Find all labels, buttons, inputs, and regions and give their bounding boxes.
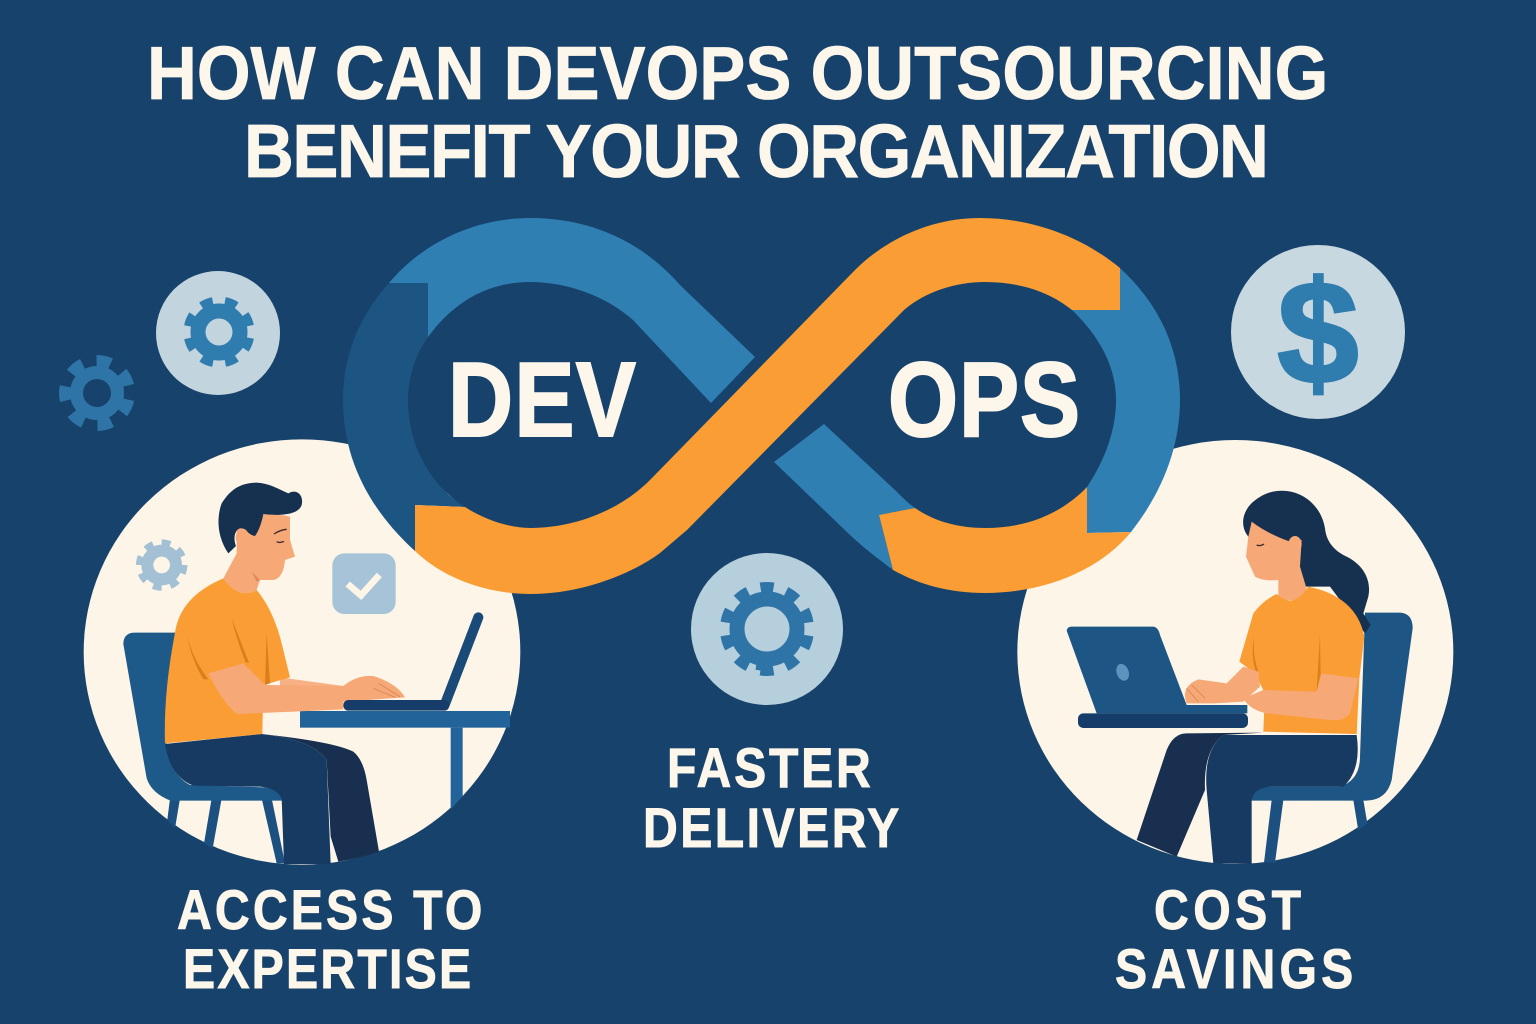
- orange crossing band: [415, 218, 1120, 594]
- shirt: [165, 578, 290, 743]
- label: faster delivery: [643, 738, 899, 860]
- title: HOW CAN DEVOPS OUTSOURCING: [147, 32, 1328, 116]
- laptop: [1067, 627, 1247, 713]
- woman at desk: [1067, 491, 1413, 864]
- title: [147, 32, 1328, 194]
- label: access to expertise: [177, 880, 482, 1001]
- eye and brow: [274, 529, 287, 542]
- chair legs: [1264, 800, 1367, 863]
- panel: cost savings illustration: [1017, 440, 1453, 864]
- rear leg: [1137, 733, 1263, 857]
- front leg: [165, 734, 331, 864]
- chair: [123, 633, 284, 801]
- neck and face: [1246, 522, 1310, 600]
- man at desk: [123, 483, 510, 864]
- devops infinity loop: [343, 218, 1180, 594]
- label: access to expertise: EXPERTISE: [183, 939, 471, 1001]
- label: faster delivery: FASTER: [667, 738, 871, 800]
- label: DEV: DEV: [448, 340, 636, 459]
- hair: [1243, 491, 1371, 633]
- ear: [236, 529, 249, 546]
- neck and face: [223, 510, 295, 593]
- icon: gear in circle center: [691, 553, 843, 705]
- chair: [1252, 613, 1413, 801]
- icon: dollar in circle: [1231, 245, 1405, 419]
- label: cost savings: COST: [1154, 880, 1301, 942]
- shirt folds: [187, 618, 270, 685]
- hair: [218, 483, 302, 553]
- panel: access to expertise illustration: [84, 439, 520, 865]
- icon: gear: [140, 543, 183, 587]
- laptop: [343, 617, 478, 711]
- shirt: [1239, 587, 1364, 734]
- label: cost savings: SAVINGS: [1115, 939, 1353, 1001]
- rear leg: [262, 734, 379, 862]
- icon: dollar in circle: $: [1277, 251, 1359, 414]
- rear arm: [280, 677, 343, 697]
- front leg: [1206, 735, 1358, 864]
- shirt folds: [1253, 635, 1321, 692]
- table: [300, 711, 510, 809]
- front arm: [208, 663, 405, 714]
- upper left light blue band: [389, 218, 755, 403]
- label: cost savings: [1115, 880, 1353, 1001]
- lower middle light blue band: [774, 424, 915, 570]
- label: faster delivery: DELIVERY: [643, 798, 899, 860]
- icon: checkmark badge: [332, 553, 396, 614]
- desk: [1078, 713, 1248, 728]
- title: BENEFIT YOUR ORGANIZATION: [244, 110, 1269, 194]
- label: OPS: OPS: [888, 340, 1080, 459]
- right light blue band: [1072, 268, 1180, 533]
- chair legs: [167, 798, 285, 863]
- icon: gear in circle top left: [156, 271, 280, 395]
- arms and hands: [1185, 667, 1260, 703]
- left dark blue band: [343, 283, 465, 551]
- lower right orange band: [879, 487, 1131, 593]
- fingers: [373, 683, 400, 697]
- label: access to expertise: ACCESS TO: [177, 880, 482, 942]
- icon: small loose gear: [59, 355, 135, 431]
